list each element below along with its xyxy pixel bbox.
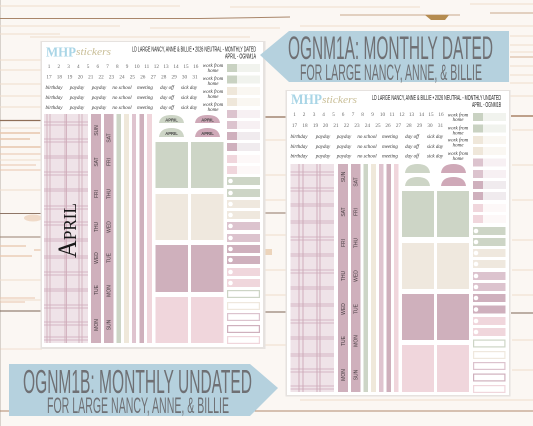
event words: payday [336,154,352,160]
month dome stickers: APRIL [201,118,214,122]
date numbers: 15 [428,112,434,118]
date numbers: 25 [130,74,135,80]
date numbers: 12 [399,112,405,118]
event words: no school [357,145,377,150]
sheet title: LD LARGE NANCY, ANNE & BILLIE • 2026 NEUTRAL - MONTHLY DATED [132,46,256,54]
sheet title [132,46,256,60]
event words: birthday [46,96,63,101]
weekday strip 1: FRI [94,190,100,198]
date numbers [292,112,444,129]
date numbers: 27 [151,74,156,80]
plaid strip with month [44,114,88,343]
plaid strip with month: APRIL [53,203,82,258]
event words: meeting [137,106,153,111]
date numbers: 14 [173,64,179,70]
wood knots [24,15,449,255]
date numbers: 23 [354,123,360,129]
date numbers: 7 [106,64,109,70]
event words: home [453,157,464,162]
date numbers: 31 [192,74,198,80]
date numbers: 16 [193,64,199,70]
weekday strip 2: WED [354,270,360,282]
logo: MHP [46,46,76,60]
weekday strip 1: THU [341,270,347,281]
date numbers: 30 [427,123,433,129]
event words: day off [160,96,174,101]
event words: home [208,95,219,100]
event words: payday [69,86,85,91]
event words: meeting [382,135,398,140]
date numbers: 3 [313,112,316,118]
weekday strip 1: SUN [341,171,347,182]
date numbers [46,64,199,80]
date numbers: 5 [332,112,335,118]
date numbers: 20 [78,74,83,80]
panel: sheet OGNM1B [286,90,510,396]
date numbers: 20 [323,123,328,129]
date numbers: 14 [419,112,424,118]
date numbers: 31 [438,123,444,129]
date numbers: 6 [97,64,100,70]
weekday strip 1: THU [94,221,100,232]
event words: meeting [137,86,153,91]
date numbers: 9 [371,112,374,118]
swatch labels column [473,113,506,223]
date numbers: 26 [140,74,146,80]
outline labels [474,340,505,392]
weekday strip 2: SUN [106,319,112,330]
event words: payday [91,86,107,91]
weekday strip 2: MON [106,285,112,297]
date numbers: 4 [322,112,325,118]
event words: no school [357,154,377,160]
callout: monthly undated banner [9,363,278,418]
event words: day off [160,86,174,91]
event words: day off [405,145,419,150]
event words: work from [203,64,224,69]
date numbers: 18 [302,123,308,129]
event words: no school [112,96,132,101]
event words: sick day [427,154,444,160]
event words [291,114,469,162]
panel: sheet OGNM1A [40,41,266,349]
event words: meeting [382,154,398,160]
event words: day off [160,106,174,111]
logo: stickers [76,46,111,58]
sheet title [372,95,501,109]
weekday strip 1: FRI [341,239,347,247]
date numbers: 9 [126,64,129,70]
callout: monthly dated banner [260,30,509,85]
weekday strip 2: MON [354,335,360,347]
date numbers: 5 [87,64,90,70]
weekday strip 2: TUE [106,252,112,263]
date numbers: 13 [409,112,414,118]
date numbers: 10 [134,64,140,70]
weekday strip 1: SUN [94,125,100,136]
event words: home [208,82,219,87]
month dome stickers: APRIL [201,131,214,136]
date numbers: 17 [292,123,298,129]
date numbers: 22 [99,74,104,80]
date numbers: 29 [172,74,177,80]
date numbers: 7 [352,112,355,118]
date numbers: 27 [396,123,402,129]
event words: no school [357,135,377,140]
event words: payday [69,96,85,101]
event words [46,64,224,113]
event words: birthday [291,135,308,140]
date numbers: 21 [333,123,339,129]
event words: home [208,69,219,74]
event words: birthday [46,86,63,91]
thin washi strips [364,164,398,392]
date numbers: 25 [375,123,381,129]
callout: monthly undated banner: OGNM1B: MONTHLY UNDATED [23,363,252,400]
event words: sick day [427,145,444,150]
event words: work from [448,126,469,132]
event words: birthday [291,154,308,160]
weekday strip 2: THU [106,188,112,199]
date numbers: 1 [48,64,51,70]
event words: work from [448,152,469,157]
swatch labels column [227,64,260,174]
date numbers: 12 [154,64,159,70]
date numbers: 28 [161,74,167,80]
weekday strip 2: SAT [354,177,360,187]
logo: stickers [322,94,357,106]
date numbers: 29 [417,123,422,129]
weekday strip 1: TUE [341,335,347,346]
event words: home [453,132,464,136]
date numbers: 11 [144,64,150,70]
date numbers: 19 [313,123,318,129]
date numbers: 2 [303,112,306,118]
date numbers: 17 [46,74,52,80]
event words: payday [336,135,352,140]
event words: home [208,108,219,113]
date numbers: 15 [183,64,189,70]
event words: payday [336,145,352,150]
logo [46,46,111,60]
date numbers: 2 [58,64,61,70]
date numbers: 1 [293,112,296,118]
date numbers: 18 [57,74,62,80]
weekday strip 2: SUN [354,369,360,380]
date numbers: 16 [438,112,444,118]
weekday strip 2 [104,114,114,343]
weekday strip 1: MON [341,369,347,381]
thin washi strips [116,114,152,343]
weekday strip 1: WED [341,303,347,315]
event words: work from [448,114,469,118]
date numbers: 11 [390,112,395,118]
dot tab labels [227,177,260,287]
weekday strip 2: FRI [354,208,360,216]
weekday strip 1: TUE [94,284,100,295]
weekday strip 2: TUE [354,303,360,314]
weekday strip 2: WED [106,221,112,233]
weekday strip 1: SAT [94,157,100,167]
sheet title: APRIL - OGNM1A [225,54,256,60]
date numbers: 8 [361,112,364,118]
date numbers: 26 [385,123,391,129]
date numbers: 6 [342,112,345,118]
date numbers: 24 [365,123,370,129]
logo: MHP [291,92,322,108]
outline labels [228,291,259,343]
callout: monthly undated banner: FOR LARGE NANCY, ANNE, & BILLIE [47,393,229,418]
date numbers: 24 [119,74,125,80]
event words: sick day [181,86,198,91]
date numbers: 8 [116,64,119,70]
event words: payday [315,145,331,150]
weekday strip 1 [338,164,348,392]
event words: work from [203,103,224,108]
date numbers: 3 [67,64,70,70]
weekday strip 2: SAT [106,133,112,143]
date numbers: 4 [77,64,80,70]
large colour boxes [156,142,224,343]
event words: no school [112,106,132,111]
date numbers: 22 [344,123,350,129]
month dome stickers: APRIL [165,131,178,136]
event words: payday [91,96,107,101]
event words: payday [315,154,331,160]
month dome stickers: APRIL [165,118,178,122]
event words: payday [91,106,107,111]
event words: birthday [46,106,63,111]
event words: sick day [181,106,198,111]
dot tab labels [473,227,506,336]
sheet title: APRIL - OGNM1B [472,102,501,109]
date numbers: 21 [88,74,94,80]
event words: home [453,144,464,148]
event words: sick day [427,135,444,140]
weekday strip 2: THU [354,237,360,248]
date numbers: 10 [380,112,386,118]
event words: sick day [181,96,198,101]
weekday strip 1 [91,114,101,343]
date numbers: 19 [67,74,73,80]
event words: meeting [137,96,153,101]
weekday strip 2 [351,164,360,392]
event words: work from [203,90,224,95]
event words: birthday [291,145,308,150]
date numbers: 23 [109,74,114,80]
event words: no school [112,86,132,91]
weekday strip 1: WED [94,252,100,264]
weekday strip 1: SAT [341,207,347,217]
date numbers: 13 [163,64,169,70]
blank dome stickers [405,164,466,186]
event words: work from [203,77,224,82]
date numbers: 28 [406,123,412,129]
event words: home [453,118,464,123]
month dome stickers [159,115,220,137]
date numbers: 30 [182,74,188,80]
weekday strip 1: MON [94,319,100,331]
event words: day off [405,154,419,160]
event words: payday [315,135,331,140]
event words: payday [69,106,85,111]
event words: day off [405,135,419,140]
weekday strip 2: FRI [106,158,112,166]
event words: meeting [382,145,398,150]
logo [291,92,357,108]
event words: work from [448,138,469,144]
large colour boxes [402,191,469,392]
plaid strip [290,164,334,392]
